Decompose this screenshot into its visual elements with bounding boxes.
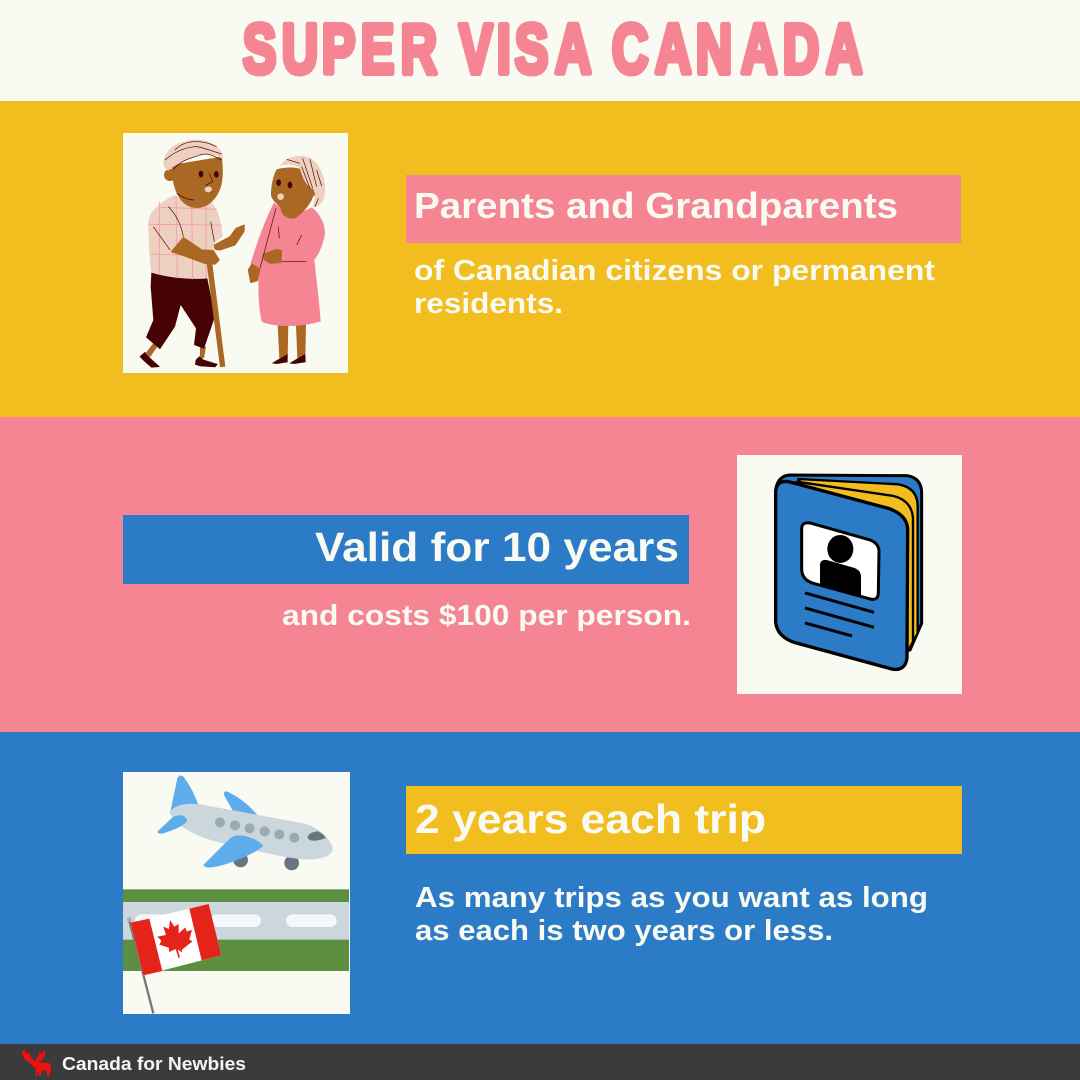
- icon: passport: [737, 455, 962, 694]
- panel: validity and cost: [0, 417, 1080, 732]
- text: parents description: [414, 255, 935, 320]
- runway: [123, 889, 349, 971]
- heading: 2 years each trip: 2 years each trip: [415, 796, 766, 842]
- heading: valid for 10 years: Valid for 10 years: [315, 524, 679, 570]
- plane: [233, 853, 248, 867]
- man: [146, 343, 157, 357]
- footer bar: [0, 1044, 1080, 1080]
- heading: 2 years each trip: [406, 786, 962, 854]
- footer brand name: Canada for Newbies: [62, 1054, 246, 1074]
- heading: parents and grandparents: [406, 175, 961, 243]
- illustration: airplane, runway and flag: [123, 772, 350, 1014]
- text: trip description: as each is two years or less.: [415, 915, 833, 947]
- panel: trip length: [0, 732, 1080, 1044]
- text: trip description: As many trips as you want as long: [415, 882, 928, 914]
- text: parents description: residents.: [414, 288, 563, 320]
- illustration: elderly couple: [123, 133, 348, 373]
- panel: parents and grandparents: [0, 101, 1080, 417]
- text: trip description: [415, 882, 928, 947]
- woman: [278, 325, 288, 358]
- text: cost: and costs $100 per person.: [282, 600, 691, 632]
- title: SUPER VISA CANADA: [243, 10, 862, 88]
- heading: parents and grandparents: Parents and Grandparents: [414, 185, 898, 226]
- icon: red moose logo: [22, 1050, 51, 1076]
- flag: [129, 921, 153, 1013]
- text: parents description: of Canadian citizens or permanent: [414, 255, 935, 287]
- heading: valid for 10 years: [123, 515, 689, 584]
